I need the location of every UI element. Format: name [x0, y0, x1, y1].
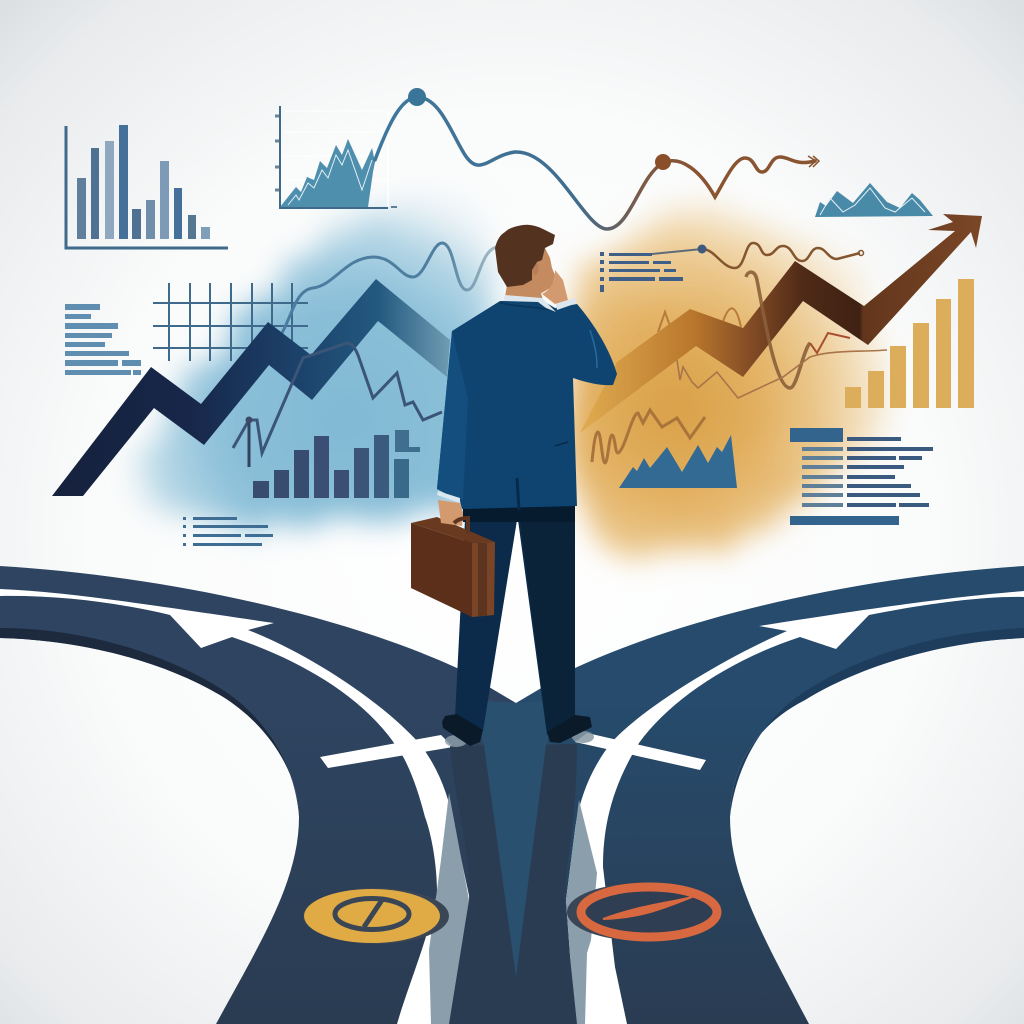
hair — [495, 225, 555, 287]
bar chart: lower left — [253, 430, 420, 498]
hook curve over brown band — [746, 272, 810, 388]
text lines: left block — [65, 304, 141, 375]
brown wavy curve with node — [652, 243, 864, 268]
briefcase handle — [454, 518, 468, 533]
blue area chart on orange — [619, 435, 737, 488]
dark curve over band — [233, 343, 442, 467]
gold bar chart — [845, 279, 974, 408]
rising zigzag band with arrow head: brown — [580, 214, 982, 433]
jagged brown and red lines — [677, 333, 887, 398]
area chart: top centre — [275, 106, 397, 208]
orange watercolor splash — [565, 202, 893, 558]
badge: yellow no-entry marker — [303, 888, 449, 944]
rising zigzag band: dark blue — [52, 279, 450, 496]
road: right fork — [516, 566, 1024, 1024]
centre road between the forks — [449, 700, 577, 1024]
hand on face — [542, 270, 568, 304]
road marking: left lane line with arrow — [0, 589, 470, 1024]
hand holding briefcase — [438, 500, 463, 526]
road: left fork — [0, 566, 516, 1024]
ear — [532, 261, 538, 275]
road marking: right lane line with arrow — [566, 591, 1024, 1024]
gray shadows beside centre — [429, 793, 597, 1024]
neck — [505, 278, 543, 300]
bar chart: top left — [66, 125, 228, 248]
blue watercolor splash — [125, 189, 495, 527]
badge: red slash marker — [567, 883, 719, 941]
small area chart: top right — [815, 183, 933, 217]
top curve from blue to brown with nodes — [375, 88, 819, 229]
shirt collar and cuffs — [437, 295, 577, 503]
small humps behind orange band — [658, 308, 741, 332]
jacket — [437, 301, 617, 510]
text lines: lower left — [183, 517, 273, 546]
blue wavy curve — [282, 243, 497, 333]
foot shadows — [445, 731, 594, 747]
man — [411, 225, 617, 746]
road marking: cross bars — [320, 733, 706, 770]
briefcase — [411, 517, 495, 617]
grid chart — [153, 283, 308, 361]
face — [528, 248, 555, 294]
trousers — [455, 506, 575, 735]
text block: right — [790, 428, 933, 525]
text lines: upper right — [600, 252, 683, 292]
lower brown wave — [592, 410, 705, 463]
shoes — [442, 714, 592, 746]
